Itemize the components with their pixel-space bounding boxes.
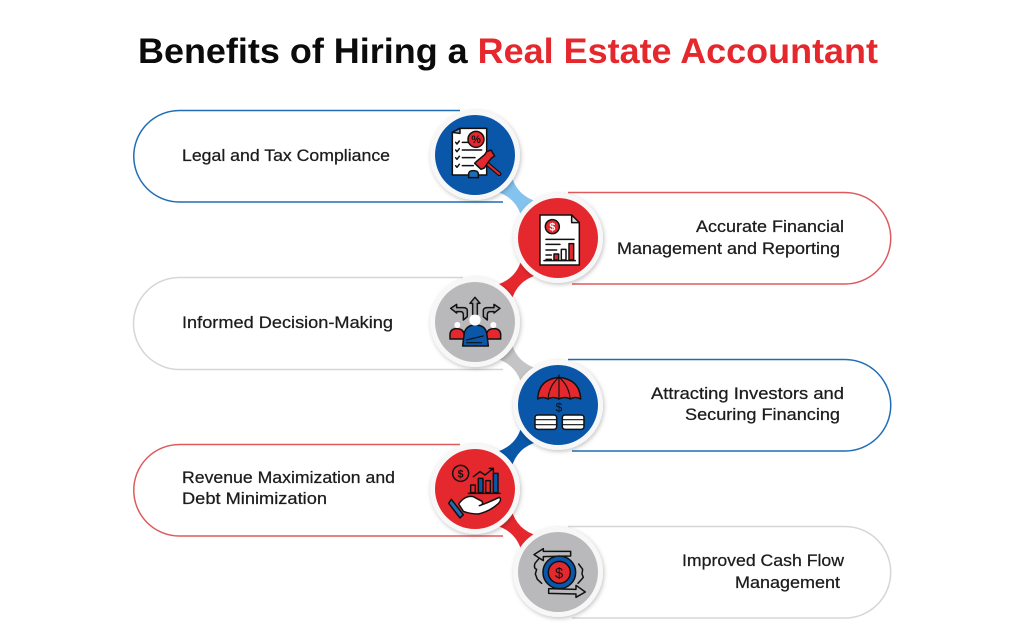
label: improved cash flow: Improved Cash Flow xyxy=(682,552,844,570)
label: legal and tax compliance: Legal and Tax Compliance xyxy=(182,147,390,165)
title: Benefits of Hiring a Real Estate Accountant xyxy=(138,32,878,71)
badge: revenue xyxy=(430,444,520,534)
label: attracting investors: Attracting Investors and xyxy=(651,385,844,403)
panel: informed decision-making xyxy=(134,278,503,370)
label: revenue maximization: Debt Minimization xyxy=(182,490,327,508)
label: improved cash flow xyxy=(682,552,844,592)
panel: improved cash flow xyxy=(568,526,891,618)
icon: report document: $ xyxy=(549,222,555,234)
badge: investors xyxy=(513,360,603,450)
badge: cash flow xyxy=(513,527,603,617)
icon: umbrella and coins: $ xyxy=(556,401,563,415)
label: attracting investors: Securing Financing xyxy=(685,406,840,424)
label: accurate financial management: Management and Reporting xyxy=(617,240,840,258)
icon: hand with chart: $ xyxy=(458,468,464,480)
badge: financial reporting xyxy=(513,193,603,283)
connector: red to grey xyxy=(496,260,537,300)
connector: grey to blue xyxy=(496,343,537,384)
panel: attracting investors xyxy=(568,360,891,451)
label: attracting investors xyxy=(651,385,844,424)
icon: gear with dollar and arrows: $ xyxy=(555,566,563,582)
label: accurate financial management xyxy=(617,218,844,258)
icon: document with gavel: % xyxy=(471,134,481,146)
panel: legal and tax compliance xyxy=(134,110,503,202)
label: informed decision-making: Informed Decision-Making xyxy=(182,314,393,332)
label: improved cash flow: Management xyxy=(735,574,840,592)
label: accurate financial management: Accurate Financial xyxy=(696,218,844,236)
panel: revenue maximization xyxy=(134,444,503,536)
label: revenue maximization: Revenue Maximization and xyxy=(182,469,395,487)
badge: decision making xyxy=(430,277,520,367)
icon: people with arrows xyxy=(450,297,501,346)
panel: accurate financial management xyxy=(568,192,891,284)
connector: blue to red lower xyxy=(496,426,537,468)
connector: red to grey lower xyxy=(496,510,537,551)
label: revenue maximization xyxy=(182,469,395,508)
badge: legal and tax xyxy=(430,110,520,200)
connector: blue to red xyxy=(496,176,537,217)
